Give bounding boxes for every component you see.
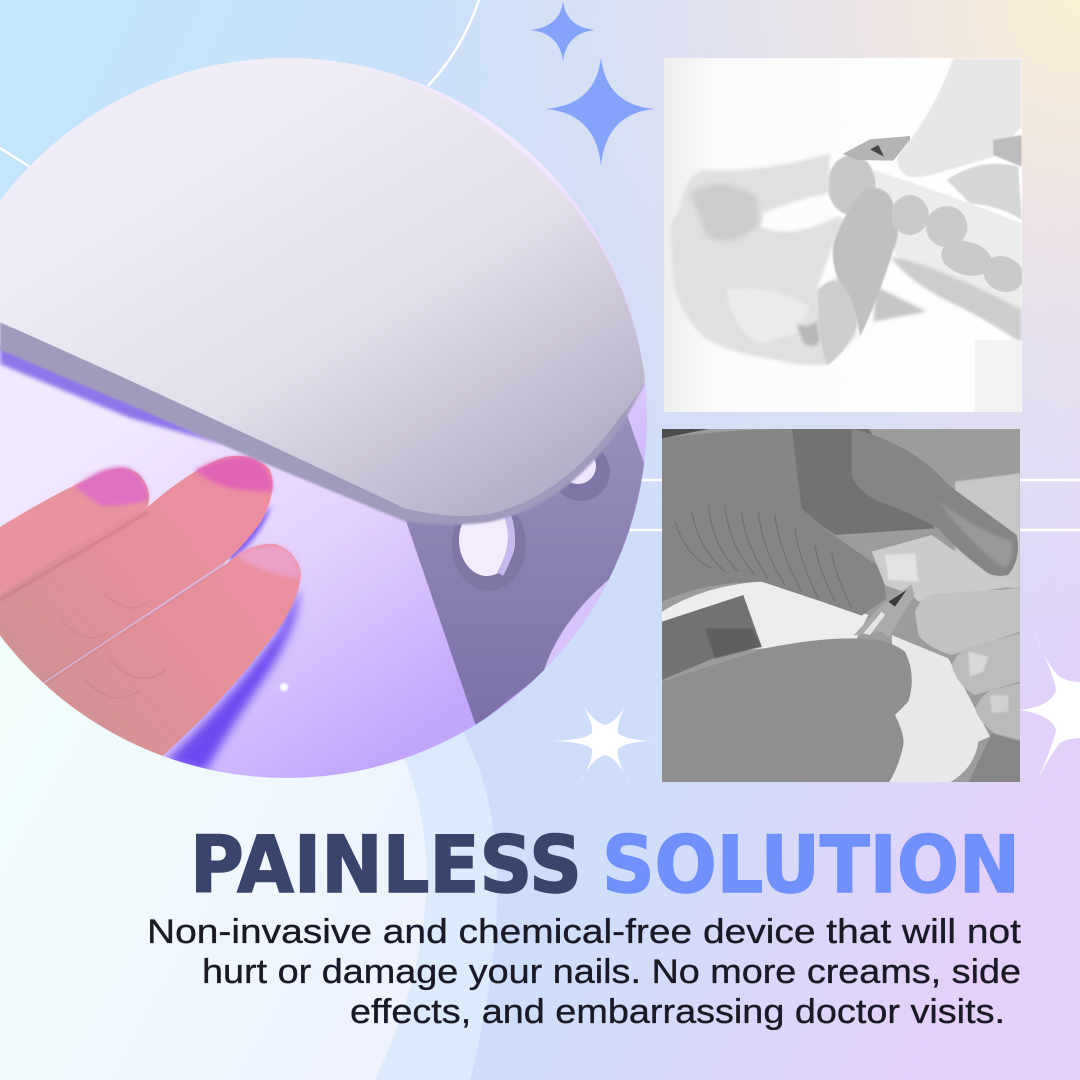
finger: lower — [42, 544, 301, 758]
paper under thumb — [662, 582, 868, 658]
palm shadow — [792, 428, 935, 535]
toe three — [952, 633, 1020, 695]
title: SOLUTION — [602, 821, 1020, 911]
title — [190, 821, 1020, 911]
index glove finger — [852, 428, 1018, 576]
foot sole — [874, 170, 1022, 310]
bottom-right block — [975, 340, 1022, 413]
hole one — [452, 514, 526, 591]
dark grey towel — [662, 595, 762, 680]
toe two — [915, 588, 1020, 655]
title: PAINLESS — [190, 821, 582, 911]
left gloved hand — [670, 153, 857, 365]
thumb glove — [662, 428, 887, 616]
lamp edge band — [0, 322, 645, 525]
skin background — [955, 473, 1020, 588]
icon: blue sparkle small — [530, 1, 595, 62]
light spot — [280, 683, 288, 691]
big toe — [828, 155, 876, 215]
lamp foot — [405, 415, 647, 726]
decorative lines — [0, 0, 1080, 530]
lit surface — [0, 58, 647, 778]
description text: hurt or damage your nails. No more creams, side — [202, 953, 1021, 991]
thumb ridges — [675, 505, 852, 608]
description text — [147, 913, 1022, 1031]
description text: Non-invasive and chemical-free device that will not — [147, 913, 1022, 951]
photo: gloved hands and nipper, bottom — [662, 428, 1020, 783]
lamp dome — [0, 58, 645, 516]
description text: effects, and embarrassing doctor visits. — [350, 993, 1005, 1031]
shadow below foot — [873, 287, 927, 322]
hole two — [560, 452, 610, 501]
icon: blue sparkle large — [545, 57, 655, 166]
upper right glove — [898, 58, 1022, 177]
paper right — [888, 635, 990, 783]
photo: cuticle nipper on toe, top — [664, 58, 1029, 413]
finger: upper — [0, 467, 149, 610]
icon: white sparkle centre — [553, 697, 652, 785]
nipper — [853, 584, 914, 638]
toes — [892, 195, 1022, 292]
bottom-right dark — [968, 733, 1020, 783]
toe four — [975, 683, 1020, 740]
icon: white sparkle right — [1020, 630, 1080, 800]
top toe — [872, 535, 1020, 602]
finger separation shadow — [0, 512, 225, 684]
background circles — [0, 620, 497, 1080]
top-left corner — [662, 428, 712, 438]
dark nipper tip — [843, 136, 910, 161]
gripping fingers — [833, 187, 898, 337]
finger glow — [165, 505, 298, 772]
finger: middle — [0, 456, 273, 683]
lamp purple underglow — [0, 345, 225, 445]
cut-out lilac area — [544, 580, 608, 670]
product photo circle — [0, 58, 647, 778]
bottom glove — [662, 638, 912, 783]
